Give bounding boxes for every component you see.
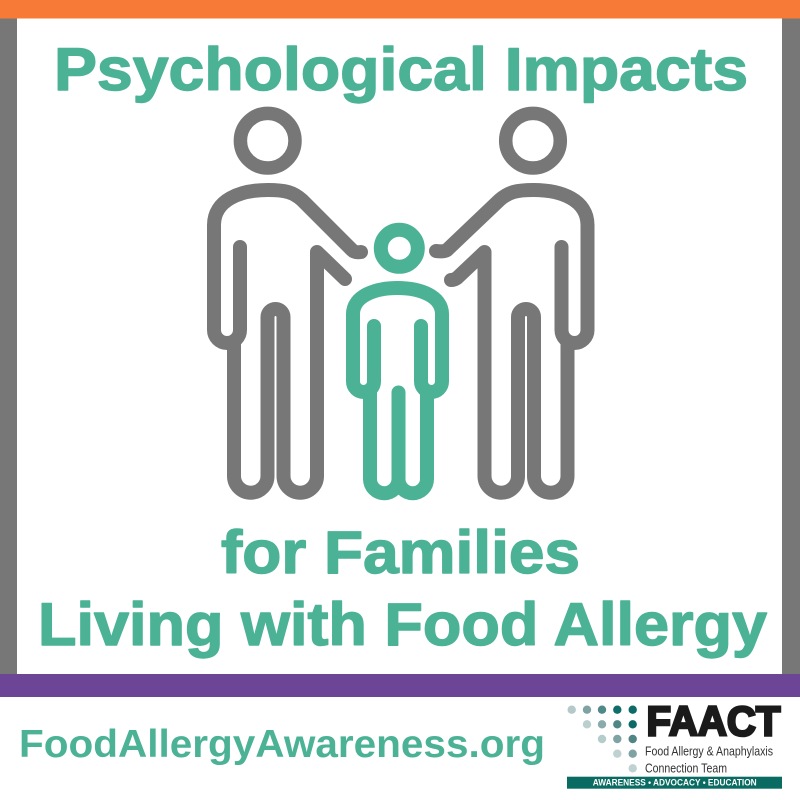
icon: right adult <box>436 113 588 493</box>
frame: right grey bar <box>782 18 800 674</box>
frame: top orange bar <box>0 0 800 18</box>
icon: family of two adults and a child <box>214 113 588 493</box>
logo: organisation name line 1: Food Allergy & Anaphylaxis <box>645 745 773 759</box>
logo: tagline band <box>567 777 782 789</box>
logo: FAACT <box>567 698 782 789</box>
logo: tagline band: AWARENESS • ADVOCACY • EDUCATION <box>593 778 757 788</box>
frame: purple bar <box>0 674 800 697</box>
logo: FAACT wordmark: FAACT <box>646 698 781 745</box>
logo: organisation name line 2: Connection Team <box>645 761 727 775</box>
icon: child <box>353 230 442 493</box>
heading: for Families: for Families <box>221 519 580 586</box>
heading: Living with Food Allergy: Living with Food Allergy <box>38 591 768 658</box>
icon: left adult <box>214 113 361 493</box>
website URL: FoodAllergyAwareness.org <box>19 723 545 766</box>
frame: left grey bar <box>0 18 17 674</box>
title: Psychological Impacts: Psychological Impacts <box>54 36 748 103</box>
logo: dot grid <box>568 706 637 772</box>
